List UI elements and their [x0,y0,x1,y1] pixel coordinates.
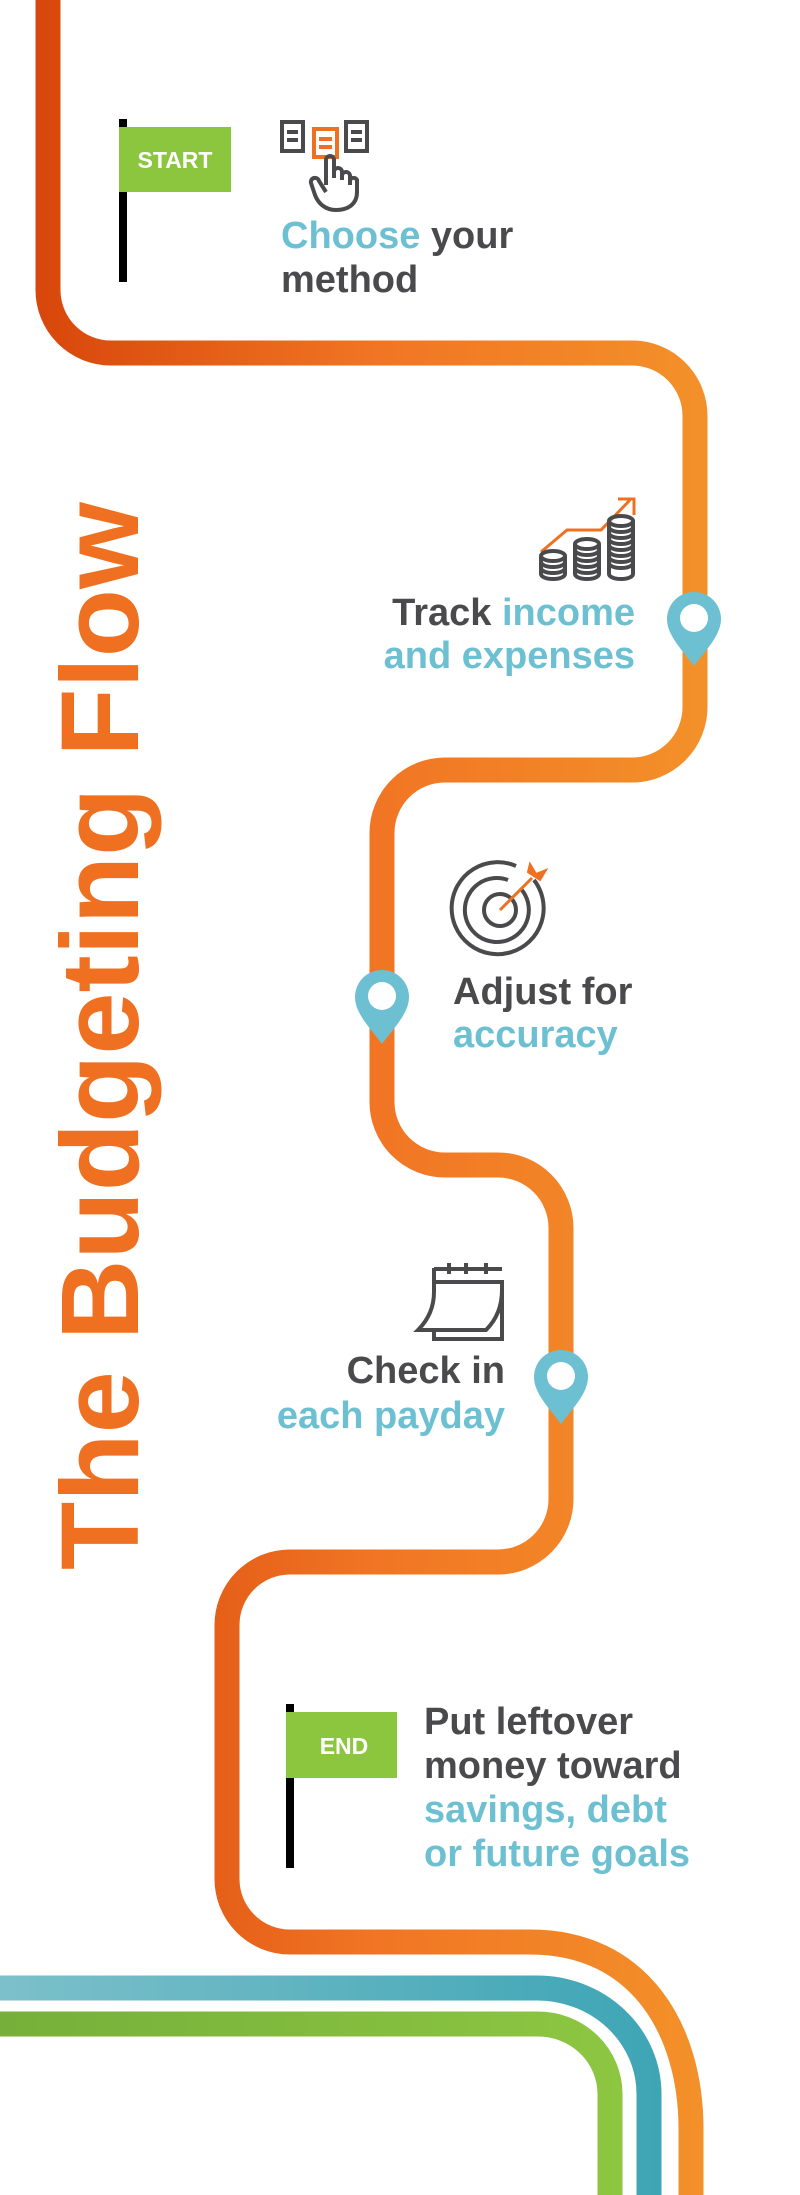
text: put leftover money: savings, debt [424,1789,667,1831]
pin 1 [667,592,721,666]
icon: coins with growth arrow [541,499,634,579]
title: The Budgeting Flow [39,502,162,1570]
icon: calendar [418,1263,502,1339]
text: put leftover money: Put leftover [424,1701,633,1743]
text: put leftover money: money toward [424,1745,682,1787]
start flag [119,119,231,282]
text: choose your method: method [281,259,418,301]
icon: choose method hand [282,122,367,210]
text: choose your method: Choose your [281,215,513,257]
end flag [286,1704,397,1868]
text: adjust for accuracy: accuracy [453,1014,618,1056]
icon: target with arrow [452,862,546,954]
text: put leftover money: or future goals [424,1833,690,1875]
end flag: END [320,1733,368,1759]
bottom band: green [0,2024,610,2195]
text: check in each payday: each payday [277,1395,505,1437]
pin 3 [534,1350,588,1424]
pin 2 [355,970,409,1044]
bottom band: teal [0,1988,649,2195]
text: adjust for accuracy: Adjust for [453,971,633,1013]
start flag: START [138,147,212,173]
text: track income and expenses: and expenses [384,635,635,677]
text: track income and expenses: Track income [392,592,635,634]
text: check in each payday: Check in [347,1350,505,1392]
